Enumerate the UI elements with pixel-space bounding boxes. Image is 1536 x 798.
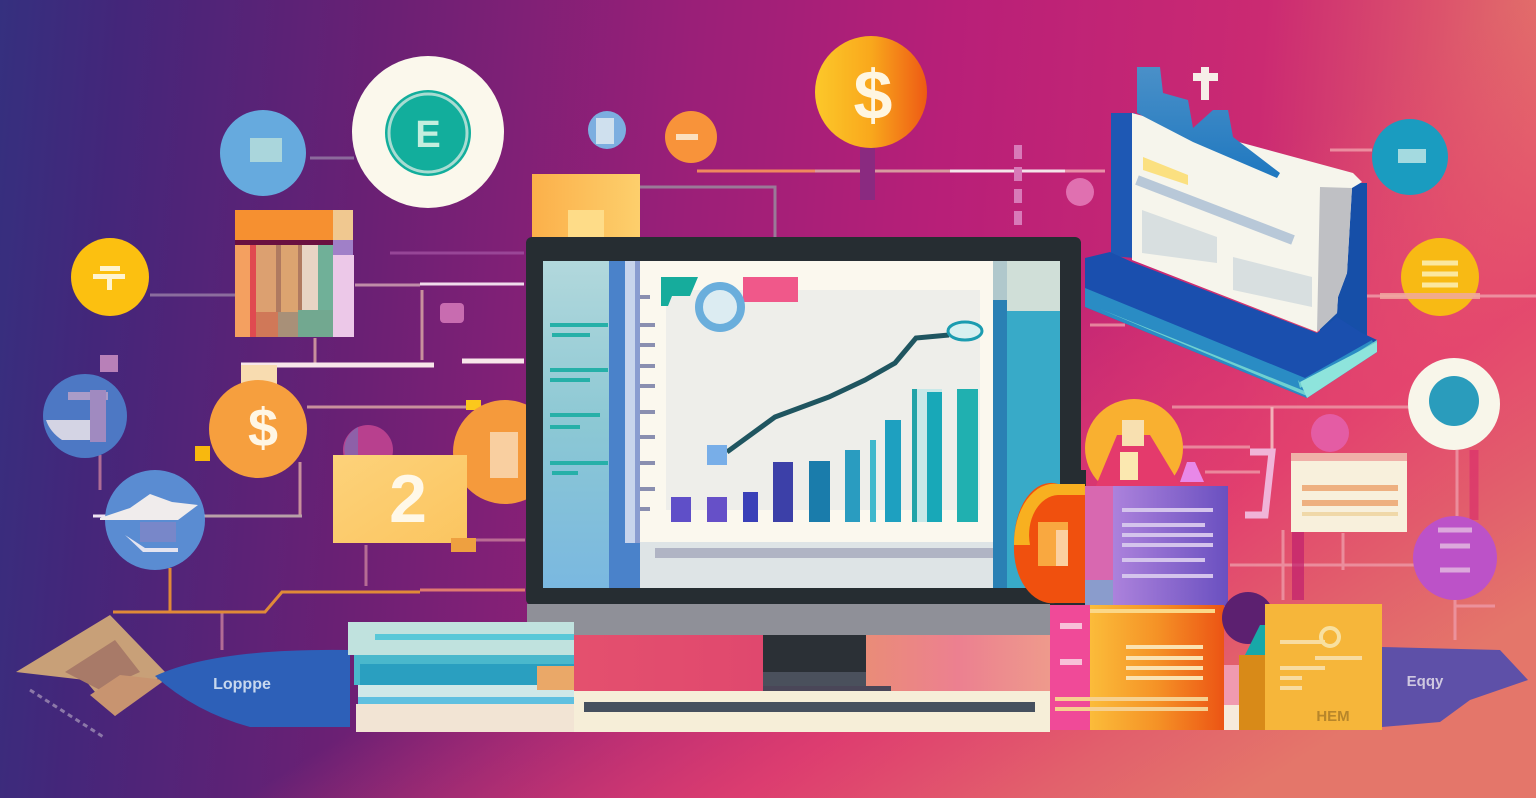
right bottom shape	[1382, 647, 1528, 727]
calendar back frame	[1111, 113, 1135, 258]
calendar paper	[1132, 113, 1362, 332]
monitor stand	[574, 632, 1050, 692]
connector lines	[93, 150, 1536, 650]
icon: pink hook	[1245, 452, 1272, 515]
icon: globe badge	[1408, 358, 1500, 450]
icon: small orange circle	[665, 111, 717, 163]
report card: yellow	[1265, 604, 1382, 730]
sidebar	[543, 261, 640, 588]
report card: orange	[1050, 605, 1224, 730]
icon: orange ring	[1014, 483, 1085, 603]
icon: purple red circle	[343, 425, 393, 475]
icon: small dots	[195, 400, 481, 461]
icon: dollar orange circle: $	[248, 398, 278, 458]
icon: dollar coin	[815, 36, 927, 200]
icon: blue circle	[220, 110, 306, 196]
table panel	[235, 210, 354, 337]
keyboard base	[574, 691, 1050, 732]
calendar base	[1085, 252, 1377, 398]
report card: yellow: HEM	[1316, 708, 1350, 725]
monitor	[526, 237, 1086, 692]
books stack	[348, 622, 574, 732]
icon: yellow circle	[71, 238, 149, 316]
left bottom shapes	[16, 615, 350, 738]
folder: number 2: 2	[389, 461, 427, 537]
bar chart	[671, 389, 978, 522]
icon: teal target badge: E	[415, 114, 441, 156]
note card	[1291, 453, 1407, 532]
icon: yellow list circle	[1380, 238, 1480, 316]
line chart	[707, 322, 982, 465]
icon: teal circle	[1372, 119, 1448, 195]
folder: orange top	[532, 174, 640, 238]
icon: small pink pins	[1018, 145, 1094, 230]
screen	[543, 261, 1060, 588]
icon: colour ring	[1222, 592, 1274, 730]
icon: dollar coin: $	[854, 56, 892, 134]
icon: small blue circle	[588, 111, 626, 149]
icon: blue hat circle	[43, 355, 127, 458]
right bottom shape: Eqqy	[1407, 673, 1444, 690]
right sidebar	[993, 261, 1060, 588]
report card: purple	[1085, 486, 1228, 606]
icon: pink blob	[440, 303, 464, 323]
chart card	[640, 261, 993, 542]
monitor frame	[526, 237, 1081, 605]
icon: teal target badge	[352, 56, 504, 208]
calendar panel	[1085, 67, 1377, 398]
left bottom shapes: Lopppe	[213, 676, 271, 693]
icon: purple circle	[1413, 516, 1497, 600]
icon: cloud circle	[100, 470, 205, 570]
icon: pink blob right	[1311, 414, 1349, 452]
icon: orange circle behind monitor	[453, 400, 557, 504]
icon: orange circle right	[1085, 399, 1204, 497]
calendar tabs	[1137, 67, 1280, 178]
folder: number 2	[333, 455, 476, 552]
icon: dollar orange circle	[209, 365, 307, 478]
